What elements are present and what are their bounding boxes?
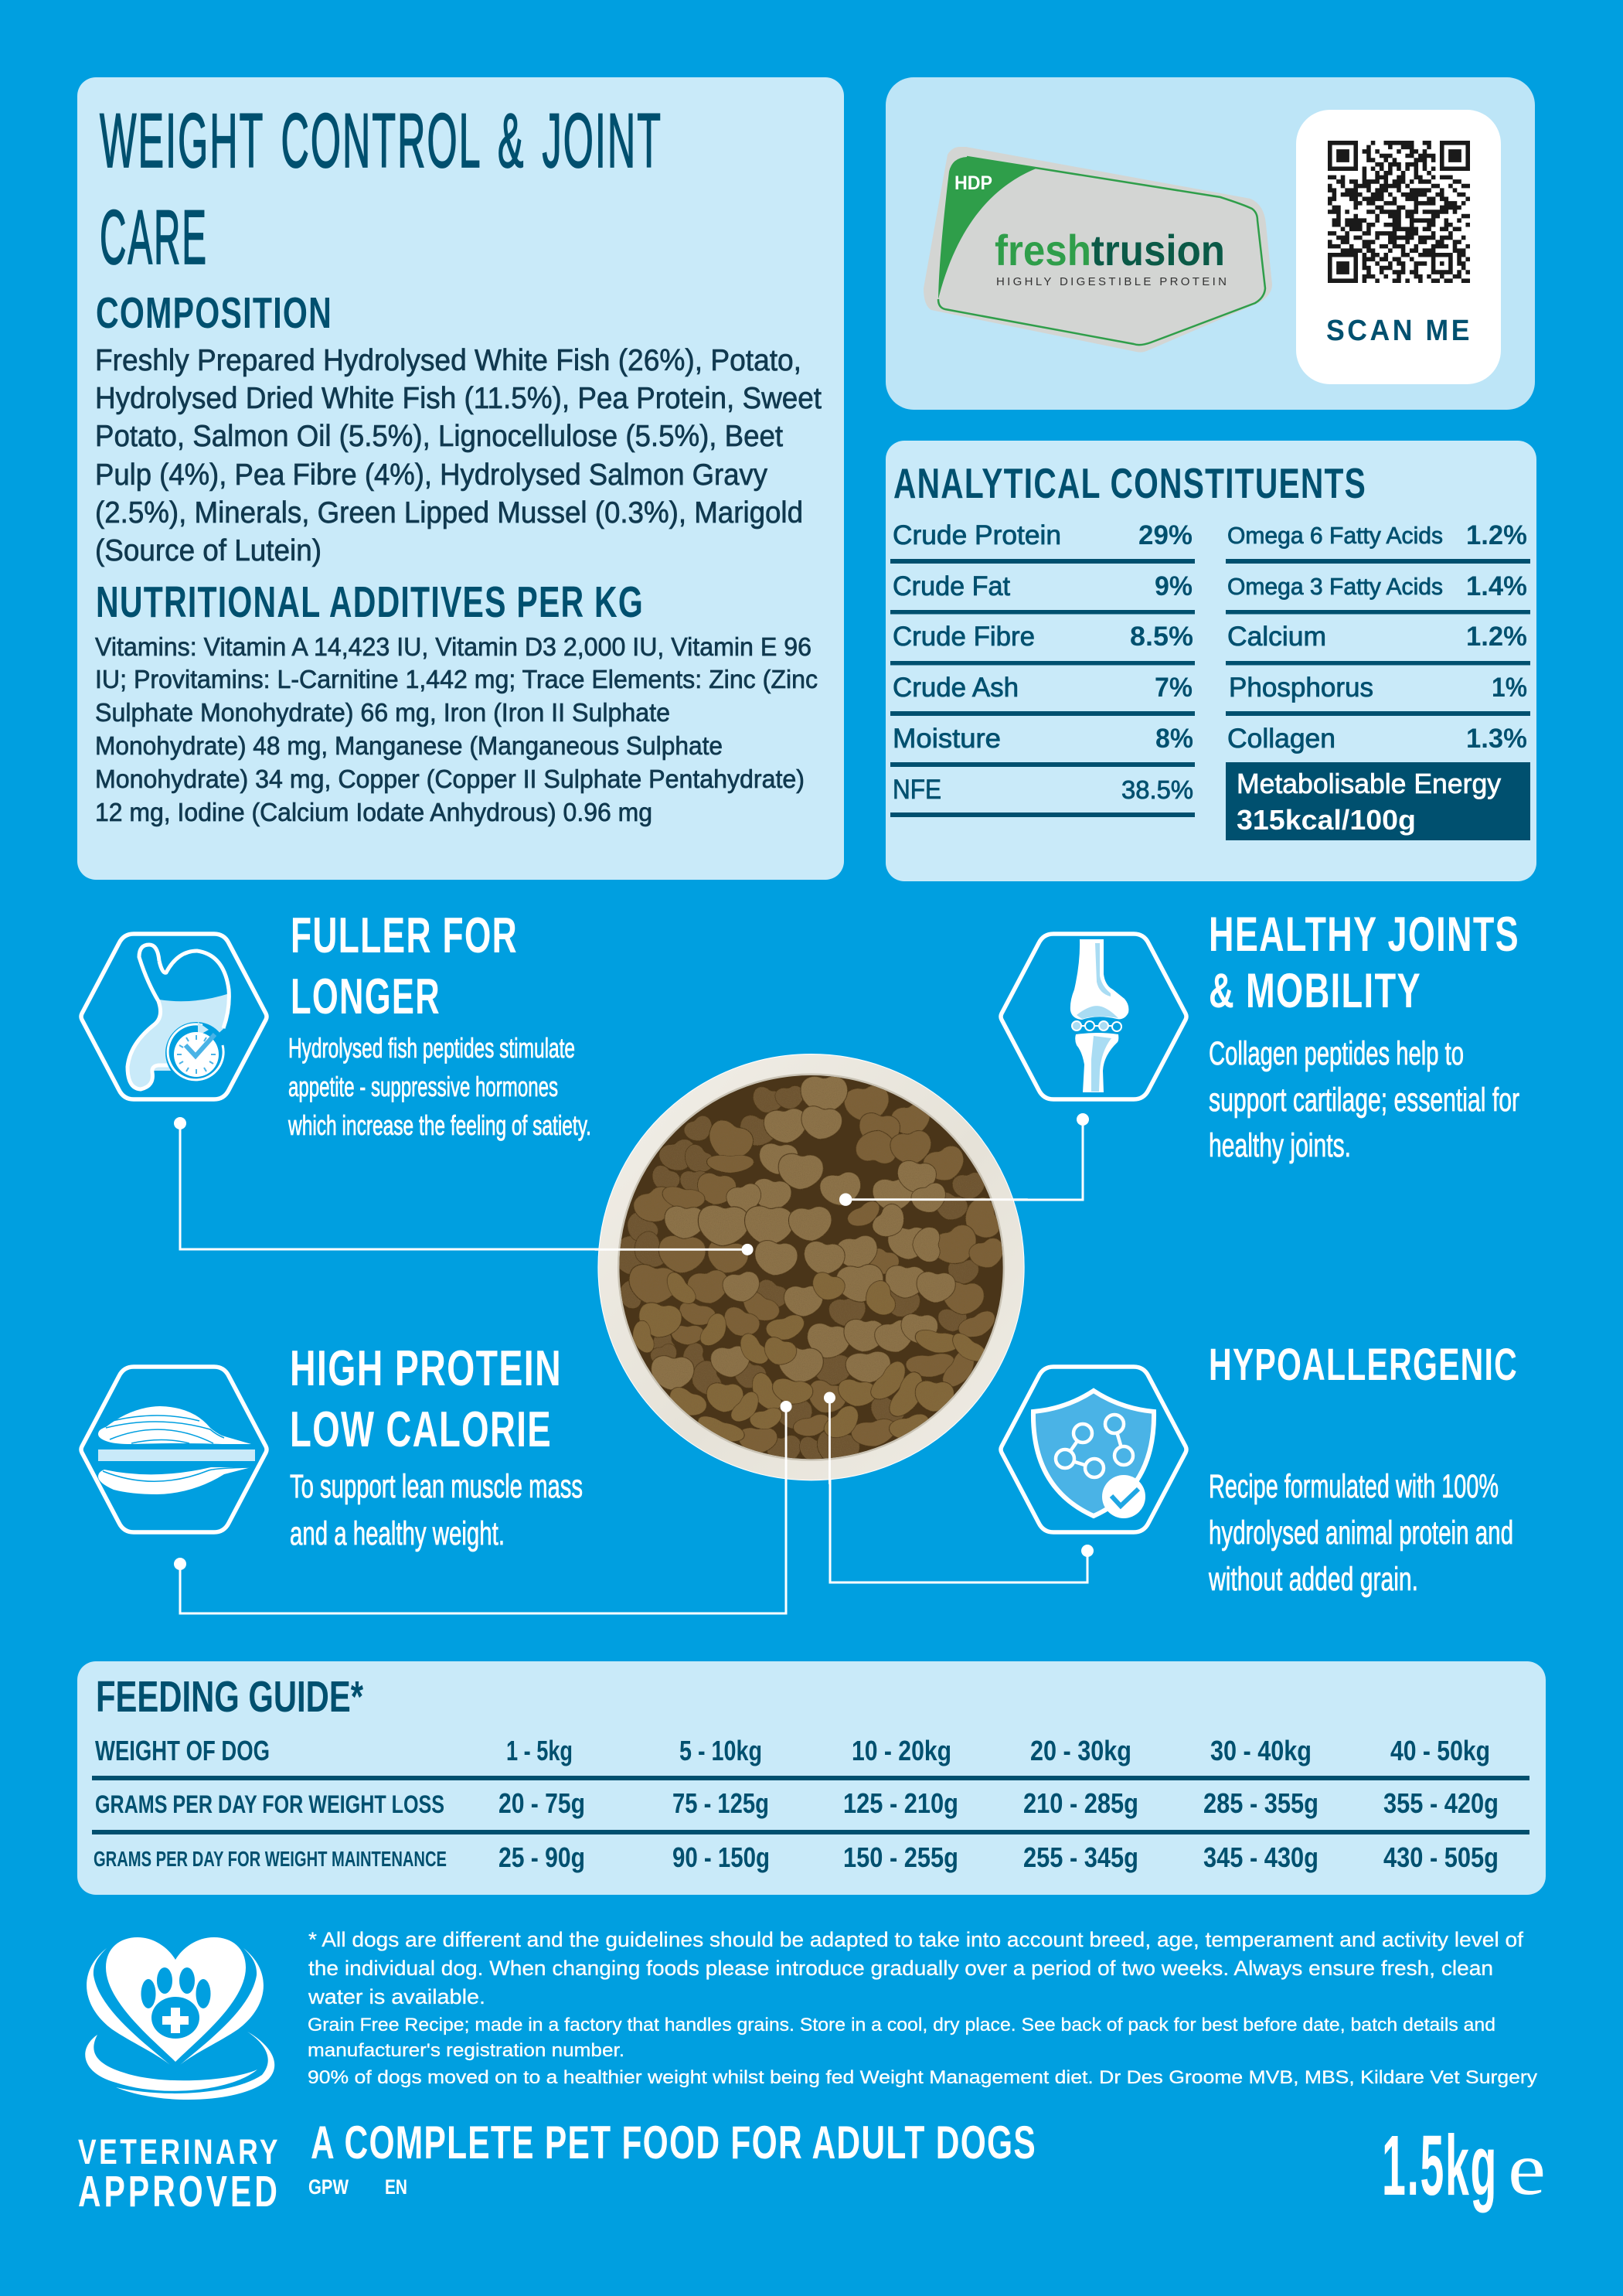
table: right column: 1.3%	[1466, 724, 1527, 754]
additives text: Sulphate Monohydrate) 66 mg, Iron (Iron II Sulphate	[95, 698, 670, 727]
footnotes: the individual dog. When changing foods please introduce gradually over a period of two weeks. Always ensure fresh, clean	[308, 1957, 1493, 1980]
bowl of kibble	[595, 1054, 1028, 1484]
footnotes: water is available.	[308, 1985, 485, 2008]
additives text: 12 mg, Iodine (Calcium Iodate Anhydrous) 0.96 mg	[95, 798, 652, 826]
feature: high protein low calorie: To support lean muscle mass	[290, 1468, 583, 1505]
table: left column: Crude Fibre	[893, 622, 1035, 652]
freshtrusion badge	[924, 147, 1272, 353]
composition text: (Source of Lutein)	[95, 534, 322, 567]
feature: healthy joints: healthy joints.	[1209, 1127, 1351, 1164]
additives text: IU; Provitamins: L-Carnitine 1,442 mg; Trace Elements: Zinc (Zinc	[95, 665, 818, 693]
language codes: GPW	[308, 2175, 349, 2199]
feeding table: WEIGHT OF DOG	[95, 1735, 270, 1766]
feeding table: 30 - 40kg	[1210, 1735, 1312, 1766]
connector lines	[180, 1119, 1087, 1613]
footnotes: * All dogs are different and the guidelines should be adapted to take into account breed, age, temperament and activity level of	[308, 1928, 1524, 1951]
table: left column: Crude Fat	[893, 571, 1010, 601]
icon: veterinary approved heart and paw	[85, 1937, 274, 2100]
feeding table: GRAMS PER DAY FOR WEIGHT LOSS	[95, 1790, 444, 1818]
composition text	[95, 344, 822, 567]
feeding table: 125 - 210g	[843, 1787, 958, 1819]
additives text	[95, 632, 818, 826]
feature: fuller for longer: appetite - suppressive hormones	[288, 1071, 558, 1102]
table: left column	[890, 520, 1195, 817]
freshtrusion badge: freshtrusion	[995, 226, 1225, 274]
panel: feeding guide	[77, 1661, 1546, 1895]
language codes	[308, 2175, 407, 2199]
QR code	[1328, 141, 1470, 283]
metabolisable energy box: 315kcal/100g	[1237, 804, 1416, 836]
table: right column: Collagen	[1227, 724, 1335, 754]
table: right column: 1.2%	[1466, 520, 1527, 550]
feature: high protein low calorie: HIGH PROTEIN	[290, 1340, 562, 1396]
veterinary approved label: VETERINARY	[78, 2132, 281, 2172]
composition text: Freshly Prepared Hydrolysed White Fish (26%), Potato,	[95, 344, 801, 377]
feature: high protein low calorie: and a healthy weight.	[290, 1515, 505, 1552]
feeding table: 25 - 90g	[498, 1841, 585, 1873]
feature: healthy joints	[1209, 908, 1519, 1164]
feeding table: 75 - 125g	[672, 1787, 769, 1819]
footnotes: manufacturer's registration number.	[308, 2040, 624, 2061]
title	[100, 97, 662, 280]
feature: fuller for longer	[288, 907, 591, 1141]
veterinary approved label	[78, 2132, 281, 2216]
composition text: Pulp (4%), Pea Fibre (4%), Hydrolysed Salmon Gravy	[95, 458, 767, 492]
table: left column: Moisture	[893, 724, 1001, 754]
icon: hexagon muscle	[81, 1367, 267, 1532]
panel: analytical constituents	[886, 441, 1536, 881]
feature: fuller for longer: FULLER FOR	[291, 907, 518, 963]
feeding table: 345 - 430g	[1203, 1841, 1318, 1873]
language codes: EN	[385, 2175, 407, 2199]
panel: freshtrusion and QR	[886, 77, 1535, 410]
additives text: Monohydrate) 34 mg, Copper (Copper II Sulphate Pentahydrate)	[95, 765, 805, 793]
feature: hypoallergenic: without added grain.	[1208, 1561, 1418, 1598]
table: right column: 1.2%	[1466, 622, 1527, 652]
feature: healthy joints: & MOBILITY	[1209, 964, 1421, 1018]
freshtrusion badge: HDP	[954, 172, 992, 194]
table: left column: Crude Protein	[893, 520, 1061, 550]
feeding table: 430 - 505g	[1383, 1841, 1499, 1873]
table: left column: 7%	[1155, 673, 1193, 703]
metabolisable energy box	[1226, 762, 1530, 840]
footnotes	[308, 1928, 1537, 2088]
table: right column: Phosphorus	[1229, 673, 1373, 703]
additives text: Monohydrate) 48 mg, Manganese (Manganeous Sulphate	[95, 731, 723, 760]
footnotes: 90% of dogs moved on to a healthier weight whilst being fed Weight Management diet. Dr Des Groome MVB, MBS, Kildare Vet Surgery	[308, 2067, 1537, 2088]
table: left column: Crude Ash	[893, 673, 1019, 703]
feature: fuller for longer: which increase the feeling of satiety.	[288, 1109, 591, 1141]
feature: healthy joints: Collagen peptides help to	[1209, 1035, 1464, 1072]
net weight: e	[1508, 2127, 1546, 2211]
table: left column: 29%	[1138, 520, 1193, 550]
feeding table: 5 - 10kg	[679, 1735, 762, 1766]
composition text: Potato, Salmon Oil (5.5%), Lignocellulose (5.5%), Beet	[95, 420, 783, 453]
heading: nutritional additives: NUTRITIONAL ADDITIVES PER KG	[96, 577, 644, 627]
feature: high protein low calorie	[290, 1340, 583, 1552]
metabolisable energy box: Metabolisable Energy	[1237, 768, 1501, 799]
table: left column: 8.5%	[1130, 622, 1193, 652]
table: right column: 1%	[1492, 673, 1527, 703]
feature: fuller for longer: Hydrolysed fish peptides stimulate	[288, 1032, 575, 1064]
composition text: Hydrolysed Dried White Fish (11.5%), Pea Protein, Sweet	[95, 382, 822, 415]
net weight: 1.5kg	[1382, 2118, 1498, 2213]
feeding table: 285 - 355g	[1203, 1787, 1318, 1819]
feature: high protein low calorie: LOW CALORIE	[290, 1401, 552, 1457]
freshtrusion badge: HIGHLY DIGESTIBLE PROTEIN	[996, 275, 1227, 288]
feeding table: 1 - 5kg	[506, 1735, 573, 1766]
table: right column	[1226, 520, 1530, 754]
table: right column: 1.4%	[1466, 571, 1527, 601]
table: left column: 9%	[1155, 571, 1193, 601]
feeding table: 355 - 420g	[1383, 1787, 1499, 1819]
title: CARE	[100, 194, 208, 280]
feeding table	[92, 1735, 1529, 1873]
table: left column: NFE	[893, 775, 941, 805]
table: right column: Omega 3 Fatty Acids	[1227, 573, 1443, 600]
feeding table: 150 - 255g	[843, 1841, 958, 1873]
veterinary approved label: APPROVED	[78, 2167, 281, 2216]
icon: hexagon stomach and clock	[81, 934, 267, 1099]
title: WEIGHT CONTROL & JOINT	[100, 97, 662, 183]
heading: analytical constituents: ANALYTICAL CONSTITUENTS	[893, 459, 1366, 507]
feeding table: 10 - 20kg	[852, 1735, 951, 1766]
feeding table: 210 - 285g	[1023, 1787, 1138, 1819]
feeding table: 40 - 50kg	[1390, 1735, 1490, 1766]
complete pet food statement: A COMPLETE PET FOOD FOR ADULT DOGS	[311, 2117, 1036, 2168]
scan me label: SCAN ME	[1326, 315, 1472, 347]
connector end dots	[174, 1113, 1094, 1570]
table: left column: 8%	[1155, 724, 1193, 754]
heading: composition: COMPOSITION	[96, 288, 332, 338]
panel: composition	[77, 77, 844, 880]
icon: hexagon knee joint	[1001, 934, 1186, 1099]
footnotes: Grain Free Recipe; made in a factory that handles grains. Store in a cool, dry place. See back of pack for best before date, batch details and	[308, 2015, 1495, 2035]
icon: hexagon shield	[1001, 1367, 1186, 1532]
heading: feeding guide: FEEDING GUIDE*	[96, 1672, 364, 1722]
feature: hypoallergenic	[1208, 1340, 1518, 1598]
composition text: (2.5%), Minerals, Green Lipped Mussel (0.3%), Marigold	[95, 496, 803, 530]
table: left column: 38.5%	[1121, 775, 1193, 804]
feeding table: 255 - 345g	[1023, 1841, 1138, 1873]
feeding table: 20 - 75g	[498, 1787, 585, 1819]
table: right column: Calcium	[1227, 622, 1326, 652]
additives text: Vitamins: Vitamin A 14,423 IU, Vitamin D3 2,000 IU, Vitamin E 96	[95, 632, 812, 661]
feature: fuller for longer: LONGER	[291, 968, 441, 1024]
table: right column: Omega 6 Fatty Acids	[1227, 522, 1443, 549]
feeding table: GRAMS PER DAY FOR WEIGHT MAINTENANCE	[94, 1847, 447, 1871]
feeding table: 90 - 150g	[672, 1841, 770, 1873]
QR card	[1296, 110, 1501, 384]
feeding table: 20 - 30kg	[1030, 1735, 1131, 1766]
